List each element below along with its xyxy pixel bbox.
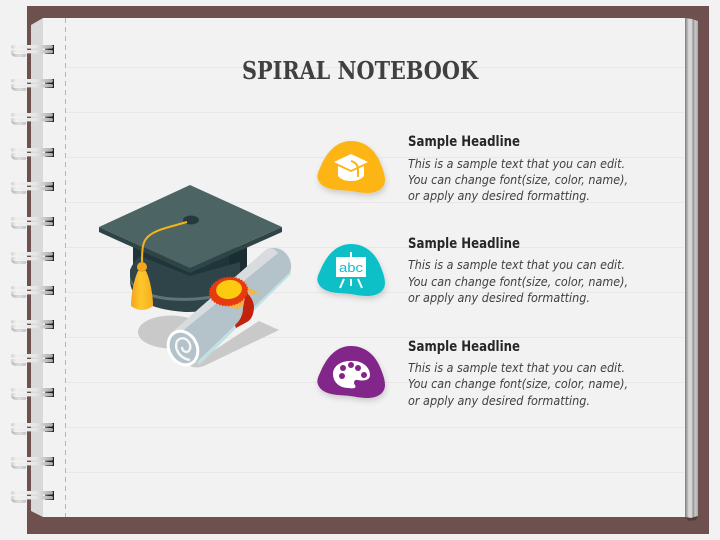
body text 3: This is a sample text that you can edit. [408,361,625,375]
body text 1: This is a sample text that you can edit. [408,157,625,171]
icon: palette on purple blob [317,346,385,398]
item 1 [317,134,628,203]
body text 2 [408,258,628,305]
headline 2: Sample Headline [408,236,520,252]
item 3 [317,339,628,408]
item 2 [317,236,628,305]
body text 2: This is a sample text that you can edit. [408,258,625,272]
right page stack [685,18,698,521]
diploma scroll [162,248,291,370]
title: SPIRAL NOTEBOOK [242,56,479,85]
icon: presentation board on teal blob: abc [339,260,364,275]
illustration: graduation cap and diploma [99,185,291,370]
body text 2: You can change font(size, color, name), [408,275,628,289]
body text 3 [408,361,628,408]
cap body [130,247,247,312]
left binding strip [31,18,43,517]
body text 2: or apply any desired formatting. [408,291,590,305]
ribbon seal [208,275,259,328]
tassel [131,222,187,310]
body text 3: You can change font(size, color, name), [408,377,628,391]
icon: graduation cap on amber blob [317,141,385,193]
spiral binding rings [11,45,54,503]
body text 1: You can change font(size, color, name), [408,173,628,187]
headline 3: Sample Headline [408,339,520,355]
icon: presentation board on teal blob [317,244,385,296]
ground shadow [138,316,279,368]
cap board [99,185,282,273]
body text 3: or apply any desired formatting. [408,394,590,408]
body text 1 [408,157,628,203]
body text 1: or apply any desired formatting. [408,189,590,203]
headline 1: Sample Headline [408,134,520,150]
